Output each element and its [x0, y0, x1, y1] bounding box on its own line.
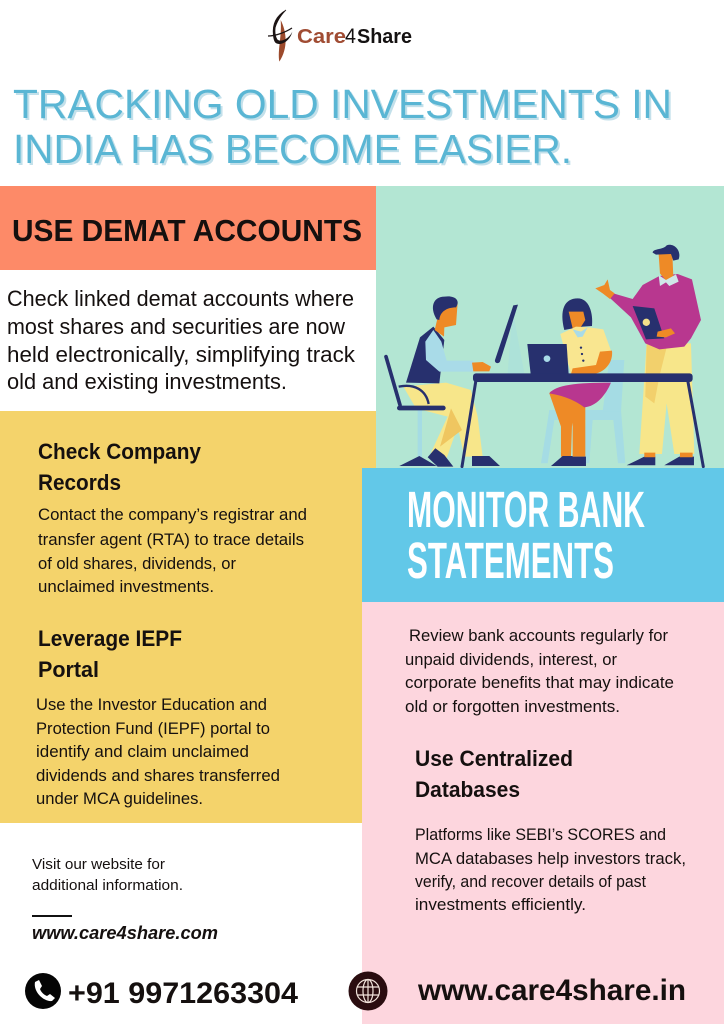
text: demat description: most shares and securities are now: [7, 314, 345, 339]
tablet: [633, 306, 664, 339]
text: IEPF: identify and claim unclaimed: [36, 742, 249, 761]
text: databases: Platforms like SEBI’s SCORES and: [415, 825, 666, 844]
icon: logo emblem: [268, 10, 292, 62]
panel: use demat accounts heading: USE DEMAT ACCOUNTS: [12, 213, 362, 248]
head: [435, 303, 458, 337]
heading: use centralized databases: Databases: [415, 777, 520, 802]
text: IEPF: under MCA guidelines.: [36, 789, 203, 808]
text: website com: www.care4share.com: [32, 923, 218, 943]
logo: [268, 10, 412, 62]
title: [13, 81, 674, 174]
text: bank review: Review bank accounts regularly for: [409, 626, 668, 645]
text: company records: [38, 505, 307, 596]
trousers: [639, 343, 694, 454]
chair: woman: [541, 410, 625, 463]
text: databases: MCA databases help investors track,: [415, 849, 686, 868]
text: IEPF: Protection Fund (IEPF) portal to: [36, 719, 270, 738]
shoes: [472, 456, 500, 466]
text: website in: www.care4share.in: [417, 974, 686, 1007]
text: demat description: [7, 286, 356, 394]
text: bank review: corporate benefits that may indicate: [405, 673, 674, 692]
illustration: three people at a desk: [386, 245, 703, 467]
panel: yellow records and IEPF: [0, 411, 376, 823]
left man: [399, 296, 500, 467]
panel: monitor bank statements heading: [362, 468, 724, 602]
icon: globe: [348, 972, 388, 1010]
vest: [406, 327, 444, 383]
text: visit website: [32, 856, 183, 894]
hand: [595, 279, 615, 299]
title: TRACKING OLD INVESTMENTS IN: [13, 81, 672, 127]
text: phone number: +91 9971263304: [68, 977, 298, 1010]
title: INDIA HAS BECOME EASIER.: [15, 128, 574, 174]
heading: check company records: Records: [38, 470, 121, 495]
heading: check company records: [38, 439, 202, 495]
legs: [549, 390, 573, 457]
title: INDIA HAS BECOME EASIER.: [13, 126, 572, 172]
heading: use centralized databases: [415, 746, 573, 802]
panel: pink bank details: [362, 602, 724, 1024]
text: visit website: additional information.: [32, 877, 183, 894]
woman: [549, 298, 612, 466]
text: IEPF: [36, 695, 280, 808]
text: demat description: held electronically, simplifying track: [7, 342, 356, 367]
title: TRACKING OLD INVESTMENTS IN: [15, 83, 674, 129]
heading: check company records: Check Company: [38, 439, 202, 464]
sweater: [610, 274, 701, 349]
right man: [595, 245, 701, 465]
text: bank review: old or forgotten investments.: [405, 697, 620, 716]
shirt and arm: [425, 330, 473, 372]
text: company records: Contact the company’s registrar and: [38, 505, 307, 524]
text: company records: of old shares, dividends, or: [38, 554, 236, 573]
heading: leverage IEPF portal: Leverage IEPF: [38, 626, 182, 651]
text: databases: [415, 825, 686, 914]
text: demat description: old and existing investments.: [7, 369, 287, 394]
icon: phone: [25, 973, 61, 1009]
hand: [472, 362, 491, 371]
head: [659, 254, 673, 281]
panel: use demat accounts heading: [0, 186, 376, 270]
heading: use centralized databases: Use Centralized: [415, 746, 573, 771]
text: databases: verify, and recover details of past: [415, 872, 646, 891]
text: IEPF: Use the Investor Education and: [36, 695, 267, 714]
monitor: [495, 305, 524, 373]
desk: [462, 373, 703, 467]
logo: 4: [345, 25, 356, 48]
left chair: [386, 357, 443, 408]
text: bank review: unpaid dividends, interest, or: [405, 650, 617, 669]
heading: leverage IEPF portal: [38, 626, 182, 682]
text: databases: investments efficiently.: [415, 895, 586, 914]
text: bank review: [405, 626, 674, 716]
text: company records: transfer agent (RTA) to trace details: [38, 530, 304, 549]
text: visit website: Visit our website for: [32, 856, 165, 873]
trousers: [403, 383, 483, 460]
logo: Share: [357, 26, 412, 48]
panel: mint illustration background: [376, 186, 724, 468]
heading: leverage IEPF portal: Portal: [38, 657, 99, 682]
text: demat description: Check linked demat accounts where: [7, 286, 354, 311]
text: IEPF: dividends and shares transferred: [36, 766, 280, 785]
laptop: [527, 344, 569, 374]
logo: Care: [297, 26, 346, 48]
hair: [653, 245, 679, 261]
text: company records: unclaimed investments.: [38, 577, 214, 596]
skirt: [549, 383, 611, 407]
